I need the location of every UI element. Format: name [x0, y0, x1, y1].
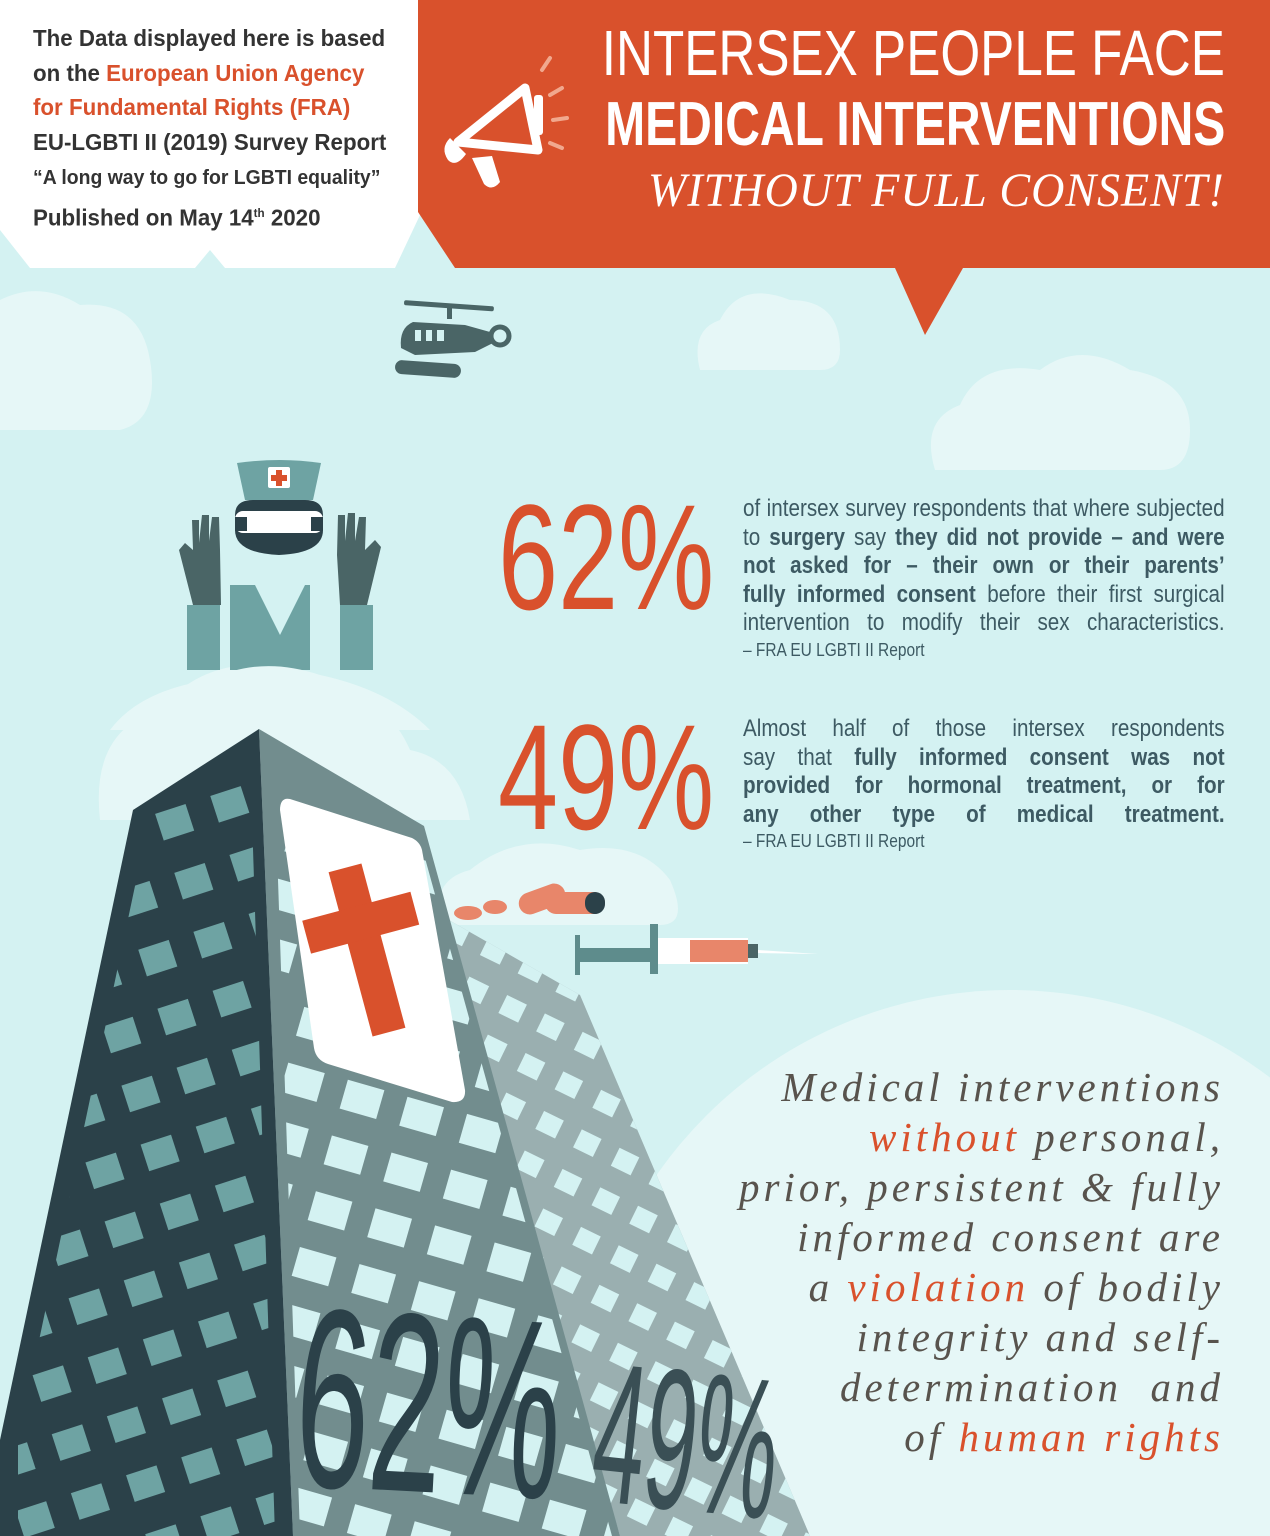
title text: WITHOUT FULL CONSENT! — [648, 164, 1225, 217]
stat 49%: Almost half of those intersex respondents — [743, 715, 1225, 742]
panel: source info: EU-LGBTI II (2019) Survey Report — [33, 128, 386, 154]
stat 49%: say that fully informed consent was not — [743, 744, 1225, 770]
stat 49%: any other type of medical treatment. — [743, 800, 1225, 828]
title text: MEDICAL INTERVENTIONS — [605, 90, 1225, 159]
stat 62% — [498, 473, 1225, 660]
stat 62%: – FRA EU LGBTI II Report — [743, 640, 925, 660]
banner: title — [418, 0, 1270, 335]
stat 62%: intervention to modify their sex characteristics. — [743, 609, 1225, 636]
icon: doctor — [179, 460, 381, 670]
panel: source info: “A long way to go for LGBTI equality” — [33, 167, 380, 189]
quote: prior, persistent & fully — [739, 1164, 1224, 1210]
quote: of human rights — [904, 1414, 1224, 1460]
stat 49%: 49% — [498, 693, 714, 861]
quote — [736, 1064, 1224, 1460]
panel: source info: Published on May 14th 2020 — [33, 204, 320, 230]
stat 62%: not asked for – their own or their parents’ — [743, 552, 1225, 579]
illustration: hospital building — [0, 729, 810, 1536]
quote: determination and — [840, 1364, 1224, 1410]
quote: a violation of bodily — [809, 1264, 1224, 1310]
stat 49%: – FRA EU LGBTI II Report — [743, 831, 925, 851]
stat 49% — [498, 693, 1225, 861]
middle face — [259, 729, 620, 1536]
icon: megaphone — [444, 56, 569, 188]
sign with cross — [280, 799, 465, 1102]
panel: source info — [0, 0, 420, 268]
stat 62%: of intersex survey respondents that where subjected — [743, 495, 1225, 522]
stat 62%: fully informed consent before their first surgical — [743, 580, 1225, 608]
panel: source info: on the European Union Agency — [33, 60, 364, 86]
cloud in front of doctor — [110, 666, 430, 730]
light right face — [440, 915, 810, 1536]
quote: integrity and self- — [856, 1314, 1224, 1360]
stat 49%: provided for hormonal treatment, or for — [743, 772, 1225, 799]
stat 62%: to surgery say they did not provide – and were — [743, 524, 1225, 550]
cloud behind doctor — [98, 667, 470, 820]
quote: informed consent are — [797, 1214, 1224, 1260]
stat 62%: 62% — [498, 473, 714, 641]
icon: helicopter — [395, 300, 512, 378]
panel: source info: for Fundamental Rights (FRA) — [33, 94, 350, 120]
panel: source info: The Data displayed here is based — [33, 25, 385, 51]
quote: without personal, — [869, 1114, 1224, 1160]
title text — [602, 17, 1225, 217]
title text: INTERSEX PEOPLE FACE — [602, 17, 1225, 89]
quote: Medical interventions — [781, 1064, 1224, 1110]
icon: pills and syringe — [454, 884, 816, 975]
dark left face — [0, 729, 293, 1536]
